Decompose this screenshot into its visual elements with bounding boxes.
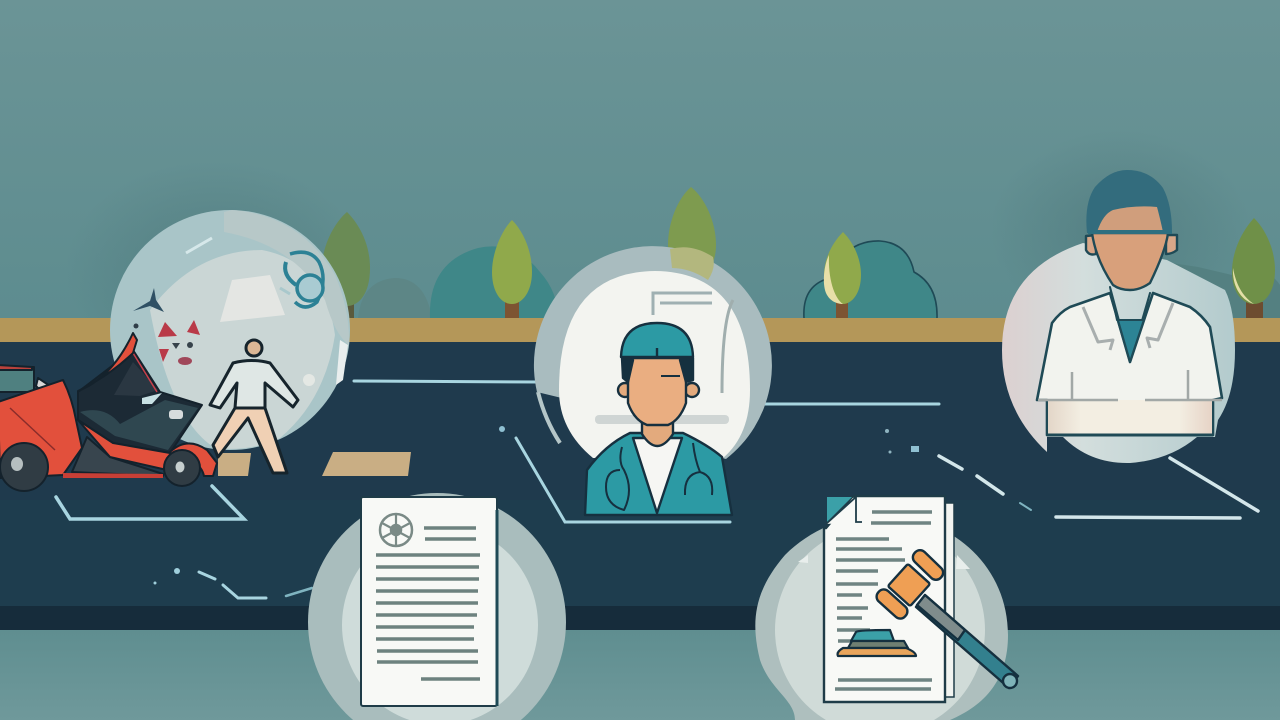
doctor figure: [585, 323, 732, 515]
ground band: [0, 318, 1280, 342]
crashed red car: [0, 333, 217, 491]
document: legal with gavel: [824, 496, 1018, 702]
bubble: clinician: [1002, 170, 1235, 463]
bubble: legal: [755, 515, 1008, 720]
bubble: accident scene: [110, 210, 350, 450]
pedestrian figure: [210, 340, 298, 473]
gavel block: [838, 630, 916, 656]
road markings: [56, 381, 1258, 598]
bubble shadows: [65, 130, 1250, 380]
bushes: [358, 241, 1280, 318]
bubble: doctor: [534, 246, 772, 515]
road: [0, 342, 1280, 606]
clinician figure: [1037, 170, 1222, 435]
debris: [133, 288, 200, 365]
icon: blue medical emblem: [280, 252, 323, 307]
bubble: report: [308, 493, 566, 720]
gavel: [874, 547, 1018, 688]
sky background: [0, 0, 1280, 320]
document: medical report: [361, 497, 497, 706]
lower ground: [0, 630, 1280, 720]
report emblem: [380, 514, 412, 546]
crosswalk slabs: [218, 452, 411, 476]
trees: [322, 187, 1275, 320]
